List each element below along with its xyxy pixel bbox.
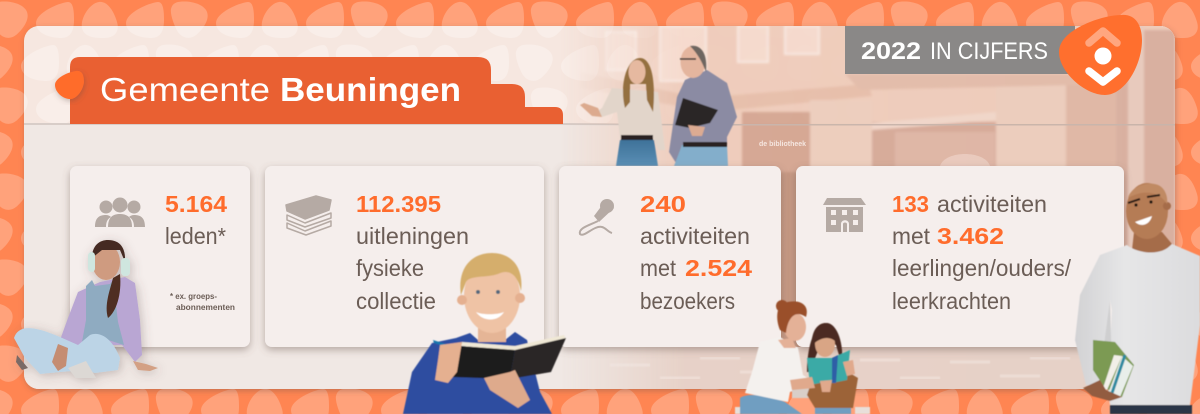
footnote — [170, 291, 235, 312]
stat text: activiteiten — [640, 223, 750, 249]
footnote: * ex. groeps- — [170, 291, 217, 301]
stat text: 133 — [892, 191, 929, 217]
panel: stat card leerlingen — [796, 166, 1124, 347]
floor — [596, 347, 1088, 389]
icon: logo — [1059, 15, 1142, 95]
stat text: 2.524 — [685, 255, 752, 281]
stat label: leden* — [165, 223, 226, 249]
stat label: collectie — [356, 288, 436, 314]
stat text — [892, 191, 1072, 314]
footnote: abonnementen — [176, 302, 235, 312]
icon: microphone — [580, 199, 614, 235]
icon: logo shape on wall — [940, 154, 990, 166]
icon: people — [95, 198, 145, 227]
stat label — [356, 223, 469, 314]
stat label: uitleningen — [356, 223, 469, 249]
badge: 2022 in cijfers: IN CIJFERS — [930, 38, 1048, 65]
stat text: leerlingen/ouders/ — [892, 255, 1072, 281]
people: woman and man walking — [580, 46, 737, 166]
windows — [606, 26, 819, 81]
stat number: 112.395 — [356, 191, 441, 217]
stat number: 5.164 — [165, 191, 227, 217]
stat text — [640, 191, 752, 314]
header banner — [55, 57, 563, 124]
stat text: 3.462 — [937, 223, 1004, 249]
panel: stat card activiteiten — [559, 166, 781, 347]
title: Gemeente — [100, 71, 270, 108]
title: Beuningen — [280, 71, 461, 108]
stat text: met — [640, 255, 677, 281]
icon: books — [286, 196, 331, 235]
panel: stat card uitleningen — [265, 166, 544, 347]
photo: man with books — [1075, 183, 1200, 414]
photo: library building background: de bibliotheek — [759, 141, 806, 148]
stat label: fysieke — [356, 255, 424, 281]
stat text: leerkrachten — [892, 288, 1011, 314]
photo: library building background — [560, 26, 1180, 389]
woman — [596, 88, 665, 150]
stat text: bezoekers — [640, 288, 735, 314]
stat text: 240 — [640, 191, 686, 217]
icon: orange blob — [55, 71, 84, 99]
man — [669, 70, 737, 163]
icon: school building — [823, 198, 866, 232]
stat text: met — [892, 223, 931, 249]
title — [100, 71, 461, 108]
photo: woman and girl reading — [735, 300, 870, 414]
photo: seated girl with headphones — [14, 240, 158, 378]
badge: 2022 in cijfers — [845, 26, 1075, 74]
badge: 2022 in cijfers: 2022 — [861, 38, 921, 65]
panel: stat card leden — [70, 166, 250, 347]
photo: boy with notebook — [403, 253, 566, 414]
stat text: activiteiten — [937, 191, 1047, 217]
